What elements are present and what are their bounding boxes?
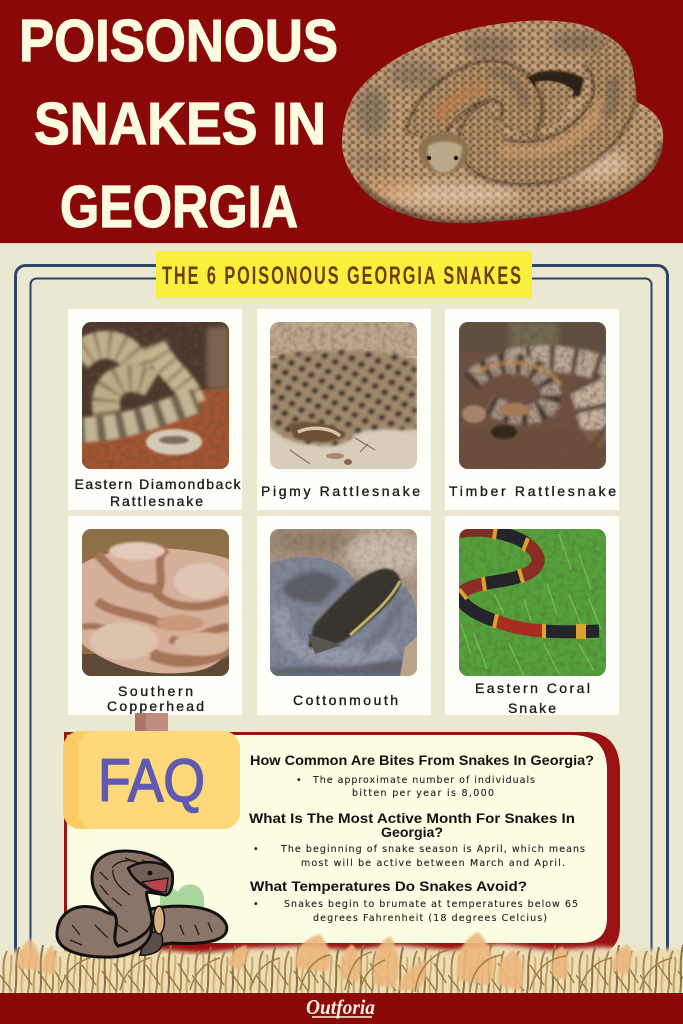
- body shading: [352, 31, 663, 223]
- question 2: Georgia?: [381, 824, 443, 840]
- photo: cottonmouth: [265, 527, 425, 676]
- banner: [156, 251, 532, 298]
- question 3: Snakes begin to brumate at temperatures below 65: [284, 899, 578, 910]
- logo: Outforia: Outforia: [306, 995, 375, 1019]
- question 3: degrees Fahrenheit (18 degrees Celcius): [313, 913, 547, 924]
- snake neck: [425, 72, 524, 136]
- rattle: [140, 906, 164, 955]
- dark crescent behind coil: [526, 70, 584, 100]
- caption: [74, 476, 242, 509]
- card: Eastern Diamondback Rattlesnake: [68, 309, 242, 510]
- question 2: What Is The Most Active Month For Snakes In: [249, 810, 575, 826]
- question 3: •: [253, 899, 259, 910]
- question 3: What Temperatures Do Snakes Avoid?: [250, 878, 527, 894]
- grass base: [0, 944, 683, 993]
- golden plumes: [17, 932, 632, 990]
- photo: eastern diamondback: [77, 322, 229, 469]
- title: GEORGIA: [60, 174, 298, 240]
- head: [128, 862, 173, 895]
- title: [19, 8, 338, 240]
- card: Pigmy Rattlesnake: [257, 309, 431, 510]
- image: coiled snake: [335, 15, 670, 230]
- neck: [92, 851, 173, 946]
- bush: [160, 884, 204, 910]
- card: Eastern Coral Snake: [445, 516, 619, 716]
- sign: FAQ: [63, 731, 240, 829]
- caption: Southern: [118, 683, 193, 699]
- question 1: How Common Are Bites From Snakes In Georgia?: [250, 752, 594, 768]
- upper coil: [480, 50, 615, 163]
- caption: Rattlesnake: [110, 493, 203, 509]
- caption: Copperhead: [107, 698, 204, 714]
- grass: [0, 932, 683, 993]
- caption: [475, 680, 590, 716]
- question 2: most will be active between March and April.: [301, 858, 565, 869]
- inner lower coil: [535, 81, 574, 130]
- caption: Timber Rattlesnake: [449, 483, 616, 499]
- title: POISONOUS: [19, 8, 338, 74]
- sign: FAQ: FAQ: [98, 747, 205, 814]
- footer band: [0, 993, 683, 1024]
- question 3: [250, 878, 578, 924]
- question 2: [249, 810, 585, 869]
- title: SNAKES IN: [34, 91, 326, 157]
- question 2: •: [253, 844, 259, 855]
- photo: eastern coral snake: [459, 526, 606, 676]
- photo: timber rattlesnake: [459, 322, 611, 469]
- snake head: [418, 133, 469, 174]
- caption: Pigmy Rattlesnake: [261, 483, 420, 499]
- caption: [107, 683, 204, 714]
- card: Timber Rattlesnake: [445, 309, 619, 510]
- question 2: The beginning of snake season is April, which means: [280, 844, 585, 855]
- double frame: [16, 266, 668, 978]
- scale marks: [70, 858, 212, 945]
- header band: [0, 0, 683, 245]
- lower coil: [57, 907, 152, 957]
- question 1: •: [296, 775, 302, 786]
- question 1: bitten per year is 8,000: [352, 788, 494, 799]
- caption: Eastern Coral: [475, 680, 590, 696]
- photo: southern copperhead: [82, 529, 230, 676]
- caption: Eastern Diamondback: [74, 476, 242, 492]
- caption: Snake: [508, 700, 556, 716]
- grass stems: [60, 950, 672, 992]
- question 1: [250, 752, 594, 799]
- card: Southern Copperhead: [68, 516, 242, 715]
- tail coil: [150, 906, 227, 946]
- photo: pigmy rattlesnake: [270, 322, 417, 469]
- cartoon rattlesnake: [57, 851, 227, 957]
- question 1: The approximate number of individuals: [312, 775, 535, 786]
- signpost: [135, 713, 168, 863]
- card: Cottonmouth: [257, 516, 431, 715]
- panel: FAQ: [64, 732, 620, 955]
- caption: Cottonmouth: [293, 692, 398, 708]
